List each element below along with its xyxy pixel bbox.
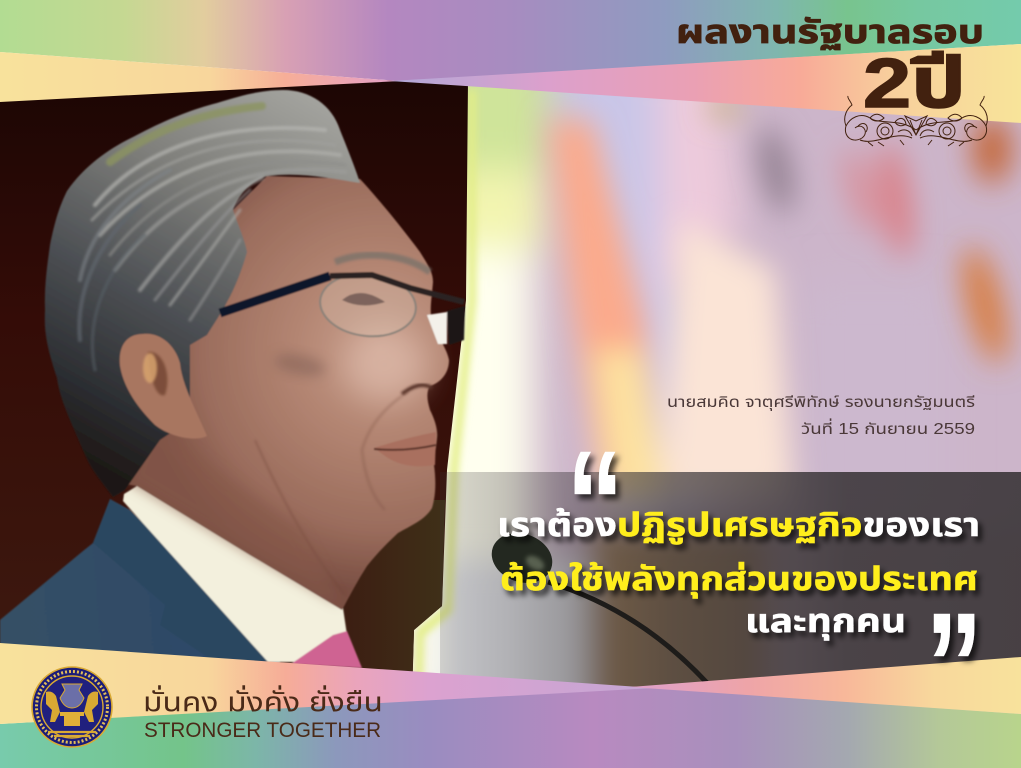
speaker name: นายสมคิด จาตุศรีพิทักษ์ รองนายกรัฐมนตรี bbox=[667, 394, 975, 411]
date: วันที่ 15 กันยายน 2559 bbox=[801, 418, 975, 438]
photo: yellow-green glow at backdrop edge bbox=[414, 90, 476, 700]
ear highlight bbox=[143, 353, 157, 383]
shirt collar bbox=[123, 486, 347, 662]
glasses lens rim bbox=[317, 269, 419, 341]
top left wedge bbox=[0, 52, 400, 102]
far frame bbox=[447, 306, 465, 345]
bottom right wedge bbox=[630, 657, 1021, 714]
ear bbox=[120, 334, 207, 439]
mic head bbox=[485, 525, 559, 591]
cheek highlight bbox=[345, 330, 425, 400]
microphone bbox=[485, 525, 708, 684]
suit lapel bbox=[93, 499, 268, 662]
mic highlight bbox=[523, 553, 547, 573]
mouth line bbox=[374, 445, 436, 450]
photo: dark backdrop left of speaker bbox=[0, 80, 468, 700]
top gradient band bbox=[0, 0, 1021, 81]
photo: olive shadow under chin bbox=[340, 500, 445, 690]
quote line 3: และทุกคน bbox=[745, 602, 906, 641]
government seal bbox=[32, 667, 112, 747]
hair bbox=[45, 90, 360, 497]
seal urn bbox=[60, 684, 84, 708]
eye bbox=[342, 293, 385, 306]
top right wedge bbox=[390, 44, 1021, 123]
slogan english: STRONGER TOGETHER bbox=[144, 718, 381, 742]
quote line 1: เราต้อง ปฏิรูปเศรษฐกิจ ของเรา bbox=[497, 506, 980, 545]
necktie bbox=[291, 631, 362, 668]
glasses temple bbox=[220, 276, 330, 313]
eyebrow bbox=[335, 255, 430, 272]
seal base bbox=[48, 732, 96, 736]
seal disc bbox=[32, 667, 112, 747]
glasses bbox=[220, 269, 465, 345]
seal lion right bbox=[84, 692, 98, 722]
slogan thai: มั่นคง มั่งคั่ง ยั่งยืน bbox=[143, 685, 383, 717]
cheek age spot bbox=[272, 350, 328, 380]
nostril bbox=[402, 385, 432, 394]
photo: blurred conference background bbox=[400, 40, 1021, 720]
title: 2 years: 2ปี bbox=[863, 44, 966, 122]
bottom left wedge bbox=[0, 643, 655, 724]
speaker portrait bbox=[0, 90, 465, 680]
neck and face skin bbox=[113, 176, 449, 610]
lips bbox=[374, 432, 436, 466]
seal pedestal bbox=[60, 712, 84, 726]
quote panel overlay bbox=[440, 472, 1021, 700]
hair strands bbox=[79, 106, 345, 370]
jaw crease shadow bbox=[255, 440, 345, 595]
mic stalk bbox=[548, 582, 708, 684]
ornament under title bbox=[845, 96, 987, 146]
neck shading bbox=[125, 420, 340, 605]
bottom gradient band bbox=[0, 687, 1021, 768]
inner ear bbox=[148, 352, 167, 395]
seal text ring bbox=[36, 672, 108, 742]
far lens bbox=[427, 312, 447, 344]
seal lion left bbox=[46, 692, 60, 722]
opening quote mark: “ bbox=[566, 419, 624, 587]
suit jacket bbox=[0, 499, 280, 680]
quote line 2: ต้องใช้พลังทุกส่วนของประเทศ bbox=[500, 560, 978, 599]
title: ผลงานรัฐบาลรอบ bbox=[676, 13, 984, 50]
closing quote mark: ” bbox=[925, 581, 983, 749]
glasses top frame bbox=[330, 275, 464, 302]
nasolabial fold bbox=[362, 392, 408, 510]
seal inner ring bbox=[41, 676, 103, 738]
